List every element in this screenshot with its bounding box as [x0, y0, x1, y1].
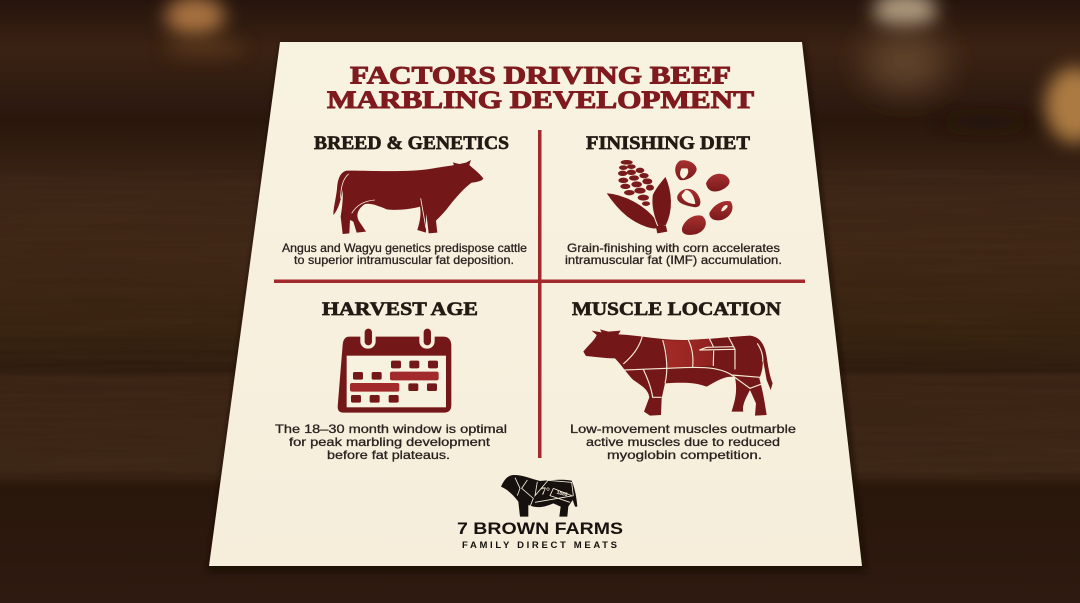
body text: harvest age: before fat plateaus. — [327, 448, 450, 462]
logo: 7 Brown Farms — [457, 475, 623, 551]
body text: muscle location: Low-movement muscles outmarble — [570, 422, 797, 436]
paper shadow — [208, 44, 866, 572]
title — [327, 60, 754, 114]
logo: 7 Brown Farms: 7 BROWN FARMS — [457, 520, 623, 538]
body text: finishing diet — [565, 241, 782, 267]
icon: beef cuts diagram — [583, 329, 773, 416]
body text: harvest age — [275, 422, 507, 462]
heading: breed and genetics: BREED & GENETICS — [314, 134, 509, 154]
icon: calendar — [338, 327, 451, 413]
title: FACTORS DRIVING BEEF — [350, 60, 731, 90]
divider: horizontal — [274, 280, 805, 283]
icon: cow silhouette — [333, 160, 483, 234]
title: MARBLING DEVELOPMENT — [327, 85, 754, 114]
panel: finishing diet — [565, 134, 782, 267]
icon: logo bull: 1885 — [556, 490, 568, 498]
body text: finishing diet: Grain-finishing with corn accelerates — [567, 241, 780, 255]
paper sheet — [209, 42, 862, 566]
heading: finishing diet: FINISHING DIET — [586, 134, 751, 154]
body text: muscle location — [570, 422, 797, 462]
body text: muscle location: myoglobin competition. — [607, 448, 762, 462]
panel: breed and genetics — [282, 134, 527, 267]
body text: breed and genetics: Angus and Wagyu genetics predispose cattle — [282, 241, 527, 255]
icon: corn and kernels — [606, 160, 732, 235]
divider: vertical — [538, 130, 542, 458]
heading: muscle location: MUSCLE LOCATION — [572, 300, 782, 320]
body text: finishing diet: intramuscular fat (IMF) accumulation. — [565, 253, 782, 267]
body text: muscle location: active muscles due to reduced — [586, 435, 780, 449]
panel: muscle location — [570, 300, 797, 462]
body text: breed and genetics: to superior intramuscular fat deposition. — [294, 253, 514, 267]
icon: logo bull: 7° — [541, 486, 550, 497]
icon: logo bull — [501, 475, 577, 517]
panel: harvest age — [275, 300, 507, 462]
body text: harvest age: The 18–30 month window is optimal — [275, 422, 507, 436]
body text: harvest age: for peak marbling development — [289, 435, 491, 449]
heading: harvest age: HARVEST AGE — [322, 300, 478, 320]
body text: breed and genetics — [282, 241, 527, 267]
logo: 7 Brown Farms: FAMILY DIRECT MEATS — [462, 540, 617, 551]
